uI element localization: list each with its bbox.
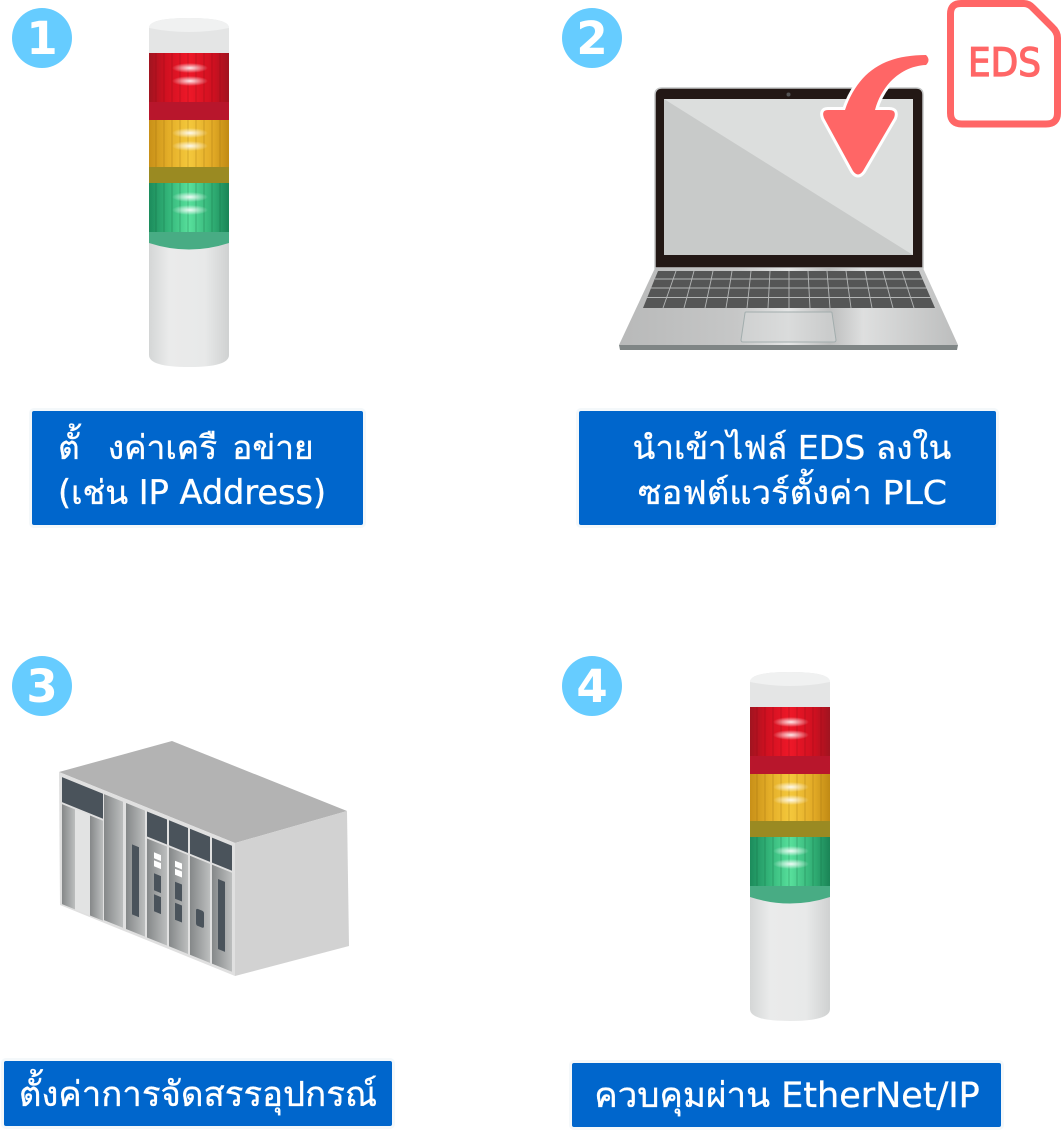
step 2 number badge: 2 [576, 12, 608, 65]
step 1 number badge: 1 [26, 12, 58, 65]
label box step 1 [32, 411, 363, 525]
icon: laptop [619, 88, 958, 350]
icon: signal tower step 1 [149, 18, 229, 367]
label box step 2: ซอฟต์แวร์ตั้งค่า PLC [638, 468, 947, 512]
icon: signal tower step 4 [750, 672, 830, 1021]
label box step 4: ควบคุมผ่าน EtherNet/IP [594, 1076, 980, 1116]
label box step 1: (เช่น IP Address) [58, 473, 326, 512]
icon: PLC rack [59, 741, 349, 976]
step 2 number badge [562, 8, 622, 68]
step 4 number badge: 4 [576, 660, 608, 713]
step 3 number badge [12, 656, 72, 716]
step 3 number badge: 3 [26, 660, 58, 713]
label box step 3: ตั้งค่าการจัดสรรอุปกรณ์ [19, 1069, 377, 1115]
step 4 number badge [562, 656, 622, 716]
icon: EDS file: EDS [968, 41, 1041, 86]
arrow: file into laptop [823, 55, 928, 174]
icon: EDS file [950, 4, 1058, 124]
label box step 2: นำเข้าไฟล์ EDS ลงใน [633, 428, 951, 467]
label box step 4 [572, 1063, 1001, 1127]
label box step 2 [579, 411, 996, 525]
step 1 number badge [12, 8, 72, 68]
label box step 1: ตั ้งค่าเคร ือข่าย [58, 423, 314, 467]
label box step 3 [4, 1061, 392, 1126]
